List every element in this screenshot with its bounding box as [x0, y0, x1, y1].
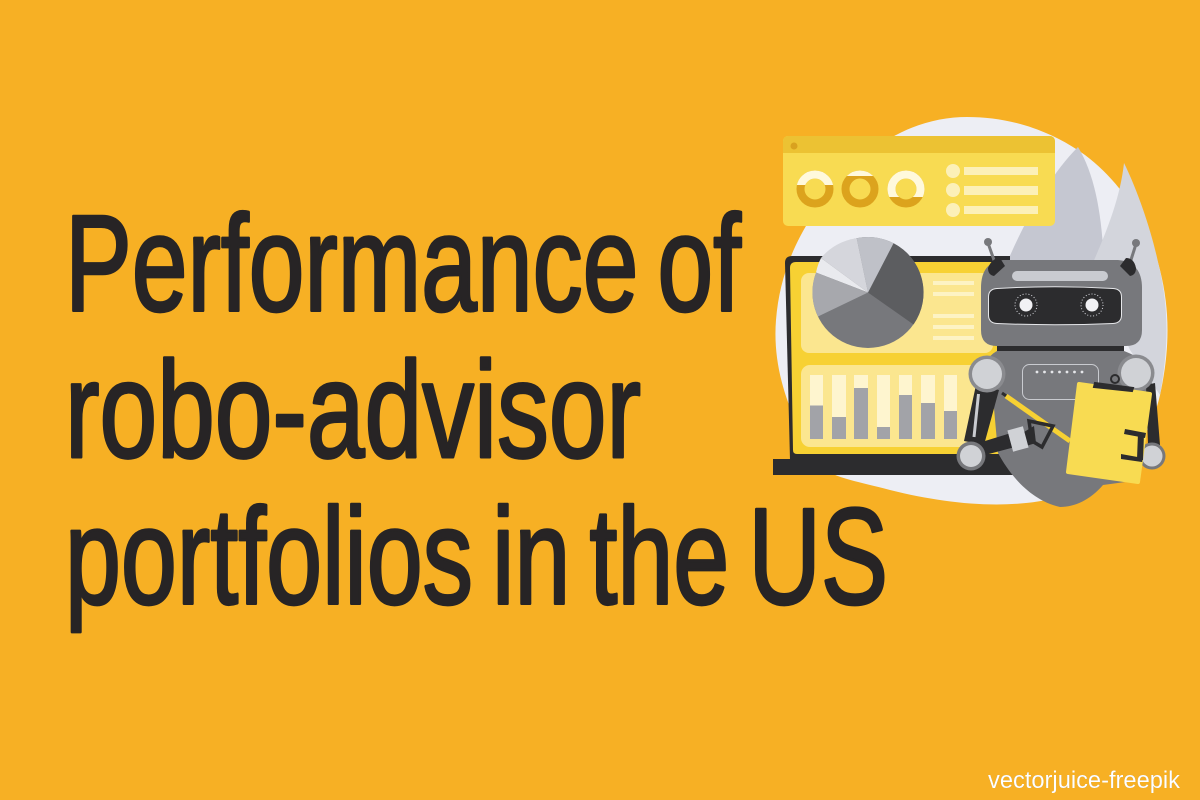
donut 2	[846, 174, 874, 204]
image credit: vectorjuice-freepik	[988, 767, 1181, 794]
title	[65, 188, 888, 634]
screen text lines	[933, 281, 974, 340]
leaf: back right	[1092, 163, 1166, 395]
legend list	[946, 164, 1038, 217]
title line 2: robo-advisor	[65, 334, 641, 487]
right hand	[1121, 429, 1146, 462]
screen panel: bar chart	[801, 365, 981, 447]
robot neck	[997, 346, 1124, 351]
robot head	[981, 258, 1142, 346]
donut 3	[892, 174, 920, 204]
pen	[1002, 393, 1070, 441]
pie chart	[812, 237, 924, 348]
chest panel	[1022, 364, 1098, 400]
robot antennae	[984, 238, 1140, 263]
screen panel: pie area	[801, 273, 993, 353]
left arm	[956, 356, 1015, 470]
dashboard card: donut charts	[783, 136, 1055, 226]
laptop	[773, 256, 1013, 475]
robot	[956, 238, 1166, 507]
donut 1	[800, 174, 830, 204]
illustration: robot advisor with dashboards	[773, 117, 1168, 507]
right arm	[1118, 354, 1166, 470]
clipboard	[1068, 375, 1150, 482]
leaf: back left	[1006, 147, 1104, 265]
title line 1: Performance of	[65, 188, 742, 340]
title line 3: portfolios in the US	[65, 480, 888, 634]
robot body	[985, 351, 1152, 507]
left hand	[1007, 421, 1053, 452]
background blob	[775, 117, 1168, 504]
